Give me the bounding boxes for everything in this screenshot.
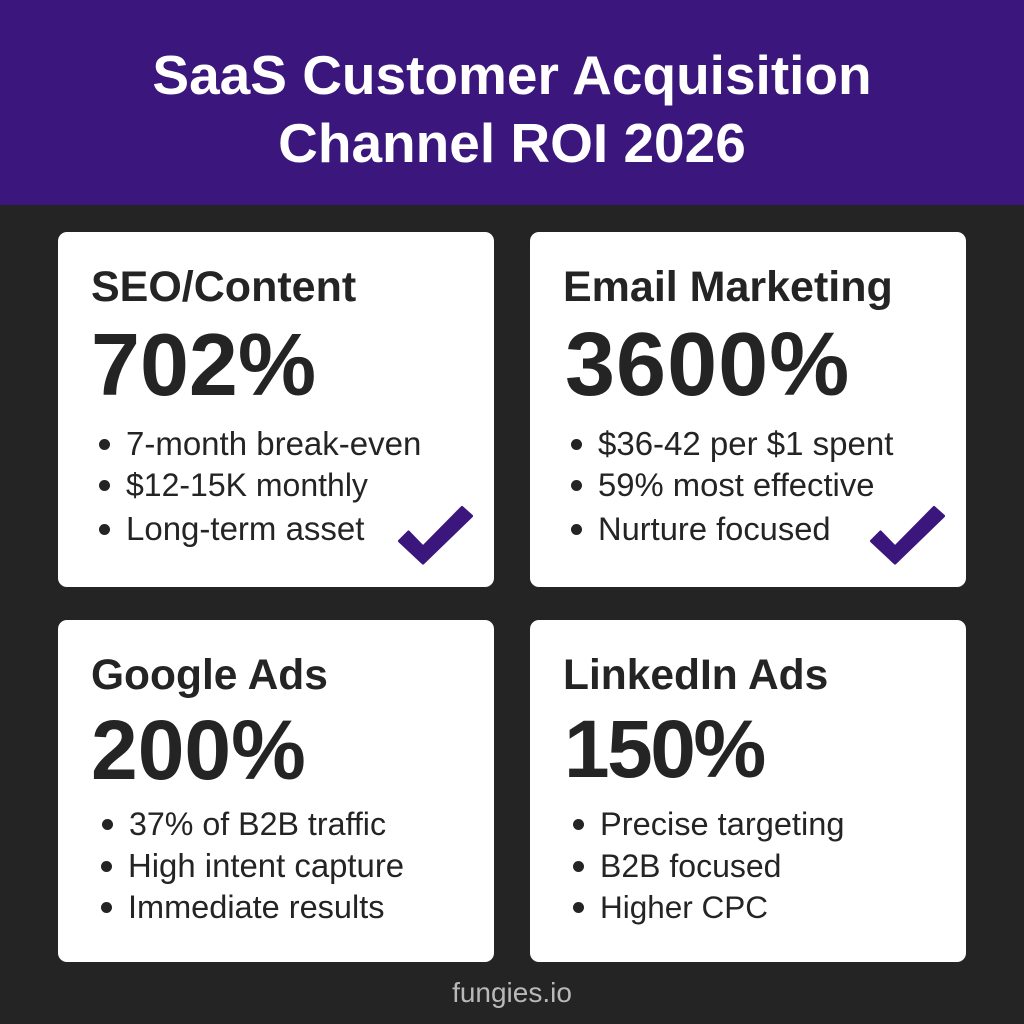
bullet list: Email Marketing: $36-42 per $1 spent xyxy=(598,424,893,462)
heading: SEO/Content: SEO/Content xyxy=(91,263,356,311)
bullet list: Google Ads xyxy=(101,806,404,925)
bullet list: LinkedIn Ads xyxy=(573,805,844,925)
metric: 702%: 702% xyxy=(91,315,316,414)
heading: LinkedIn Ads: LinkedIn Ads xyxy=(563,652,828,698)
heading: Google Ads: Google Ads xyxy=(91,652,328,698)
bullet list: Google Ads: Immediate results xyxy=(128,889,384,925)
metric: 200%: 200% xyxy=(91,703,306,797)
panel: Google Ads xyxy=(58,620,494,962)
bullet list: SEO/Content xyxy=(99,424,421,547)
panel: SEO/Content xyxy=(58,232,494,587)
bullet list: LinkedIn Ads: Higher CPC xyxy=(600,889,768,925)
heading: Email Marketing: Email Marketing xyxy=(563,263,893,311)
footer: fungies.io: fungies.io xyxy=(452,977,572,1008)
bullet list: Email Marketing xyxy=(571,424,894,546)
title: SaaS Customer Acquisition xyxy=(152,44,872,106)
metric: 3600%: 3600% xyxy=(565,315,850,415)
icon: check mark xyxy=(398,506,474,565)
bullet list: Google Ads: 37% of B2B traffic xyxy=(129,806,386,842)
bullet list: SEO/Content: Long-term asset xyxy=(126,510,364,546)
bullet list: Google Ads: High intent capture xyxy=(128,847,404,884)
title xyxy=(152,44,872,174)
metric: 150%: 150% xyxy=(564,704,764,795)
title: Channel ROI 2026 xyxy=(278,112,746,174)
bullet list: Email Marketing: Nurture focused xyxy=(598,510,831,546)
icon: check mark xyxy=(870,506,946,565)
panel: LinkedIn Ads xyxy=(530,620,966,962)
bullet list: Email Marketing: 59% most effective xyxy=(598,466,874,503)
bullet list: LinkedIn Ads: B2B focused xyxy=(600,848,781,884)
header band xyxy=(0,0,1024,205)
panel: Email Marketing xyxy=(530,232,966,587)
bullet list: SEO/Content: $12-15K monthly xyxy=(126,467,368,503)
bullet list: SEO/Content: 7-month break-even xyxy=(126,424,421,462)
bullet list: LinkedIn Ads: Precise targeting xyxy=(600,805,844,842)
